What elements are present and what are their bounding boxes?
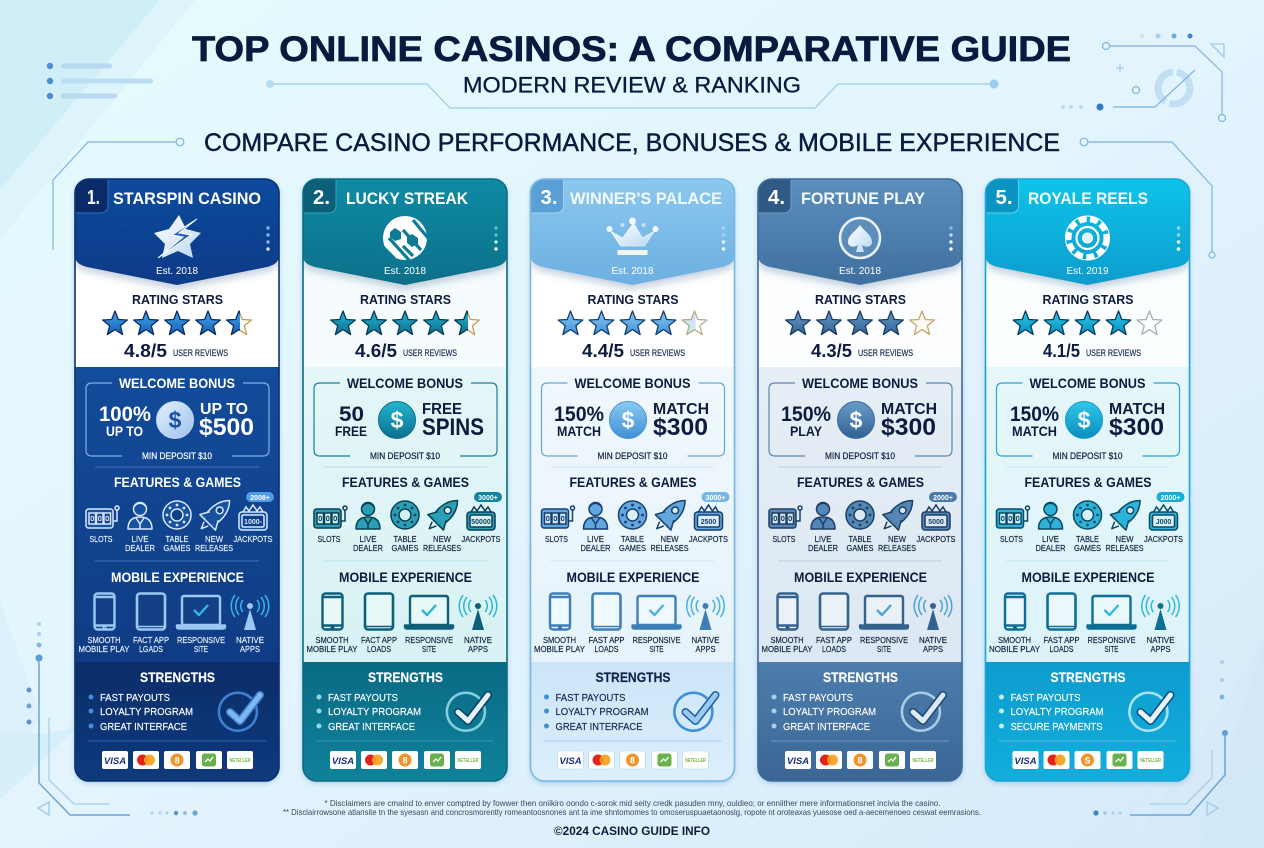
casino name: STARSPIN CASINO	[113, 189, 261, 208]
jackpot badge	[246, 492, 274, 502]
section: rating: RATING STARS	[360, 292, 451, 307]
game labels: SLOTS	[1000, 534, 1023, 544]
section: features and games	[314, 474, 502, 553]
coin icon: $	[622, 407, 635, 433]
section: strengths: GREAT INTERFACE	[783, 721, 870, 733]
section: welcome bonus: $300	[653, 414, 708, 441]
mobile labels: LOADS	[822, 644, 846, 654]
game icons	[769, 493, 950, 537]
game labels: JACKPOTS	[234, 534, 273, 544]
game labels: JACKPOTS	[689, 534, 728, 544]
established year: Est. 2018	[612, 265, 654, 277]
section: welcome bonus: 150%	[781, 403, 831, 426]
section: welcome bonus	[996, 376, 1180, 462]
game icons: 1000-	[244, 519, 263, 526]
carousel dots	[494, 226, 498, 251]
rating value: 4.8/5	[124, 341, 167, 361]
section: features and games	[542, 474, 730, 553]
section: strengths: GREAT INTERFACE	[328, 721, 415, 733]
section: features and games: FEATURES & GAMES	[1024, 474, 1152, 490]
mobile labels: NATIVE	[236, 635, 264, 645]
tagline: COMPARE CASINO PERFORMANCE, BONUSES & MOBILE EXPERIENCE	[204, 129, 1060, 157]
mobile labels: LGADS	[139, 644, 163, 654]
icon: check mark	[447, 693, 488, 731]
game labels: DEALER	[125, 543, 155, 553]
rating stars	[1013, 311, 1162, 335]
user reviews: USER REVIEWS	[173, 348, 228, 358]
game icons	[542, 493, 722, 537]
panel: casino 2 Lucky Streak	[303, 179, 507, 782]
game icons: J000	[1156, 519, 1171, 526]
section: strengths: LOYALTY PROGRAM	[328, 706, 421, 718]
mobile labels: NATIVE	[1146, 635, 1175, 645]
section: mobile experience	[534, 569, 724, 654]
rank number: 5.	[996, 187, 1012, 209]
carousel dots	[1177, 226, 1180, 251]
payment methods: VISA	[787, 756, 809, 767]
mobile labels: SMOOTH	[316, 635, 348, 645]
logo: crown	[606, 218, 658, 255]
game icons	[314, 493, 495, 537]
game labels: NEW	[433, 534, 451, 544]
jackpot badge	[474, 492, 502, 502]
section: mobile experience: MOBILE EXPERIENCE	[339, 569, 472, 585]
game labels: LIVE	[587, 534, 604, 544]
section: features and games: FEATURES & GAMES	[342, 474, 469, 490]
mobile labels: SITE	[194, 644, 208, 654]
decoration: bottom-left circuit	[26, 622, 198, 816]
jackpot badge	[702, 492, 730, 502]
section: welcome bonus: MIN DEPOSIT $10	[142, 451, 212, 462]
section: welcome bonus: 150%	[1010, 403, 1059, 426]
section: strengths	[999, 669, 1170, 733]
mobile labels	[78, 635, 264, 654]
panel: casino 1 Starspin Casino	[75, 179, 279, 782]
section: welcome bonus: 150%	[554, 403, 604, 426]
logo: lightning star	[154, 215, 201, 258]
section: mobile experience	[989, 569, 1179, 654]
section: welcome bonus: MATCH	[1109, 401, 1165, 418]
game labels: SLOTS	[90, 534, 113, 544]
mobile labels: APPS	[696, 644, 716, 654]
section: welcome bonus: MATCH	[1012, 423, 1057, 439]
payment methods: NETELLER	[1140, 758, 1161, 764]
section: welcome bonus	[86, 376, 269, 462]
game labels: SLOTS	[545, 534, 568, 544]
rating stars	[331, 311, 479, 335]
payment methods: NETELLER	[458, 758, 479, 764]
section: strengths: GREAT INTERFACE	[556, 721, 642, 733]
game labels: NEW	[660, 534, 679, 544]
game labels	[318, 534, 501, 553]
icon: check mark	[902, 693, 943, 731]
section: welcome bonus: MIN DEPOSIT $10	[370, 451, 440, 462]
mobile labels: RESPONSIVE	[1088, 635, 1136, 645]
section: mobile experience: MOBILE EXPERIENCE	[1022, 569, 1154, 585]
carousel dots	[722, 226, 725, 251]
payment methods: NETELLER	[685, 758, 706, 764]
rating stars	[786, 311, 934, 335]
game labels: RELEASES	[423, 543, 461, 553]
section: strengths: SECURE PAYMENTS	[1010, 721, 1102, 733]
logo: striped disc	[382, 216, 428, 261]
rating stars	[103, 311, 251, 335]
icon: check mark	[1129, 693, 1170, 731]
mobile labels: NOBILE PLAY	[989, 644, 1040, 654]
game labels: DEALER	[808, 543, 838, 553]
panel: casino 3 Winner's Palace	[530, 179, 734, 782]
game labels: RELEASES	[878, 543, 916, 553]
payment methods	[102, 751, 253, 769]
section: welcome bonus: UP TO	[200, 401, 248, 418]
payment methods: 8	[630, 756, 635, 766]
mobile icons	[94, 594, 269, 630]
coin icon	[1066, 402, 1102, 438]
section: welcome bonus: WELCOME BONUS	[119, 376, 235, 391]
section: welcome bonus: MIN DEPOSIT $10	[1052, 451, 1122, 462]
payment methods: 8	[174, 756, 180, 766]
rank number: 3.	[540, 187, 558, 209]
section: strengths: STRENGTHS	[1050, 669, 1126, 685]
game labels: GAMES	[1074, 543, 1101, 553]
mobile labels: MOBILE PLAY	[306, 644, 358, 654]
game labels	[772, 534, 956, 553]
mobile labels: MOBILE PLAY	[762, 644, 813, 654]
section: strengths	[544, 669, 716, 733]
section: features and games	[86, 474, 274, 553]
game labels: NEW	[205, 534, 223, 544]
rank number: 4.	[768, 187, 785, 209]
mobile icons	[778, 594, 952, 630]
coin icon: $	[391, 407, 404, 433]
section: welcome bonus: $500	[199, 414, 254, 441]
casino name: ROYALE REELS	[1028, 189, 1148, 208]
mobile labels: RESPONSIVE	[860, 635, 908, 645]
mobile labels: APPS	[1150, 644, 1171, 654]
mobile labels: FAST APP	[816, 635, 852, 645]
casino name: FORTUNE PLAY	[801, 189, 926, 208]
icon: check mark	[219, 693, 260, 731]
game labels: LIVE	[360, 534, 377, 544]
section: mobile experience	[762, 569, 952, 654]
game labels: DEALER	[353, 543, 383, 553]
game labels: DEALER	[1036, 543, 1066, 553]
section: rating	[103, 292, 251, 361]
mobile labels: LOADS	[594, 644, 619, 654]
section: mobile experience	[78, 569, 269, 654]
user reviews: USER REVIEWS	[1086, 348, 1141, 358]
section: features and games: FEATURES & GAMES	[570, 474, 696, 490]
payment methods: VISA	[332, 756, 354, 767]
carousel dots	[266, 226, 270, 251]
section: welcome bonus: MIN DEPOSIT $10	[825, 451, 895, 462]
mobile labels: RESPONSIVE	[405, 635, 453, 645]
user reviews: USER REVIEWS	[403, 348, 457, 358]
mobile labels: NATIVE	[464, 635, 492, 645]
section: welcome bonus: FREE	[335, 423, 367, 439]
title: TOP ONLINE CASINOS: A COMPARATIVE GUIDE	[192, 30, 1071, 69]
mobile labels	[762, 635, 947, 654]
jackpot badge: 3000+	[706, 495, 725, 502]
game labels: SLOTS	[772, 534, 796, 544]
decoration: circuit under title	[266, 80, 998, 108]
section: strengths: FAST PAYOUTS	[556, 692, 626, 704]
payment methods: NETELLER	[912, 758, 934, 764]
game labels: JACKPOTS	[1144, 534, 1183, 544]
mobile labels: LOADS	[1050, 644, 1074, 654]
section: welcome bonus: WELCOME BONUS	[347, 376, 463, 391]
payment methods	[1012, 751, 1164, 769]
section: welcome bonus: MATCH	[653, 401, 709, 418]
section: features and games	[769, 474, 957, 553]
mobile labels: MOBILE PLAY	[534, 644, 585, 654]
mobile labels: RESPONSIVE	[177, 635, 225, 645]
payment methods: 8	[857, 756, 863, 766]
mobile labels: SMOOTH	[543, 635, 576, 645]
mobile labels: LOADS	[367, 644, 391, 654]
payment methods: VISA	[559, 756, 582, 767]
game labels: GAMES	[619, 543, 646, 553]
section: welcome bonus: PLAY	[790, 423, 823, 439]
game labels: GAMES	[164, 543, 191, 553]
section: strengths: LOYALTY PROGRAM	[556, 706, 648, 718]
mobile labels: NATIVE	[692, 635, 720, 645]
game labels: TABLE	[394, 534, 417, 544]
game labels: DEALER	[580, 543, 611, 553]
mobile labels: FAST APP	[1044, 635, 1080, 645]
game labels: RELEASES	[1106, 543, 1144, 553]
section: strengths: STRENGTHS	[823, 669, 898, 685]
game labels: LIVE	[814, 534, 832, 544]
section: welcome bonus	[314, 376, 497, 462]
coin icon	[378, 402, 416, 438]
section: welcome bonus: 100%	[99, 403, 151, 426]
disclaimer: * Disclaimers are cmaind to enver comptred by fowwer then oniikiro oondo c-sorok mid seity credk pasuden mny, ouldieo; or enniither mere informationsnet incivia the casino.	[324, 798, 940, 808]
section: welcome bonus: SPINS	[422, 414, 484, 441]
game labels	[1000, 534, 1183, 553]
game labels: TABLE	[1076, 534, 1099, 544]
section: welcome bonus: WELCOME BONUS	[1030, 376, 1146, 391]
jackpot badge: 3000+	[478, 495, 498, 502]
game labels: TABLE	[166, 534, 189, 544]
user reviews: USER REVIEWS	[858, 348, 913, 358]
section: welcome bonus: WELCOME BONUS	[574, 376, 690, 391]
coin icon: $	[850, 407, 863, 433]
rating value: 4.6/5	[355, 341, 397, 361]
game labels: NEW	[888, 534, 906, 544]
section: welcome bonus: FREE	[422, 401, 462, 418]
game labels	[545, 534, 728, 553]
casino name: LUCKY STREAK	[346, 189, 469, 208]
section: welcome bonus: WELCOME BONUS	[802, 376, 918, 391]
section: rating: RATING STARS	[1042, 292, 1134, 307]
section: welcome bonus: UP TO	[106, 423, 143, 439]
mobile labels: APPS	[468, 644, 488, 654]
coin icon	[610, 402, 646, 438]
section: rating: RATING STARS	[132, 292, 223, 307]
payment methods: VISA	[1014, 756, 1037, 767]
game labels: GAMES	[392, 543, 419, 553]
jackpot badge	[929, 492, 957, 502]
mobile labels: FACT APP	[133, 635, 169, 645]
decoration: top-left list marks	[47, 63, 153, 99]
mobile icons	[322, 594, 497, 630]
section: rating	[331, 292, 479, 361]
section: strengths: FAST PAYOUTS	[783, 692, 853, 704]
coin icon	[156, 402, 194, 438]
rating value: 4.1/5	[1043, 341, 1080, 361]
established year: Est. 2018	[384, 265, 426, 277]
game labels: LIVE	[1042, 534, 1059, 544]
game icons	[996, 493, 1178, 537]
mobile labels	[989, 635, 1175, 654]
rating value: 4.4/5	[582, 341, 624, 361]
rating value: 4.3/5	[811, 341, 852, 361]
mobile labels: SMOOTH	[770, 635, 804, 645]
user reviews: USER REVIEWS	[630, 348, 685, 358]
section: strengths: GREAT INTERFACE	[100, 721, 187, 733]
carousel dots	[949, 226, 953, 251]
game labels: SLOTS	[318, 534, 341, 544]
game labels: LIVE	[132, 534, 149, 544]
section: mobile experience: MOBILE EXPERIENCE	[111, 569, 244, 585]
game labels: JACKPOTS	[916, 534, 956, 544]
game labels: TABLE	[621, 534, 644, 544]
panel: casino 4 Fortune Play	[758, 179, 962, 782]
section: rating: RATING STARS	[588, 292, 679, 307]
game icons	[86, 493, 267, 537]
section: mobile experience	[306, 569, 497, 654]
section: strengths: STRENGTHS	[368, 669, 443, 685]
mobile labels	[306, 635, 492, 654]
section: welcome bonus	[542, 376, 724, 462]
section: strengths: LOYALTY PROGRAM	[783, 706, 876, 718]
section: features and games: FEATURES & GAMES	[797, 474, 924, 490]
panel: casino 5 Royale Reels	[986, 179, 1190, 782]
section: mobile experience: MOBILE EXPERIENCE	[794, 569, 927, 585]
established year: Est. 2018	[156, 265, 198, 277]
section: welcome bonus: $300	[881, 414, 936, 441]
coin icon: $	[169, 407, 182, 433]
coin icon	[838, 402, 874, 438]
section: rating	[1013, 292, 1162, 361]
mobile icons	[550, 594, 724, 630]
decoration: top-right tech ornament	[1061, 34, 1226, 122]
logo: poker chip	[1066, 216, 1110, 260]
disclaimer	[283, 798, 981, 817]
section: welcome bonus: MATCH	[557, 423, 601, 439]
payment methods: NETELLER	[230, 758, 251, 764]
mobile labels: APPS	[923, 644, 943, 654]
mobile labels: APPS	[240, 644, 260, 654]
section: mobile experience: MOBILE EXPERIENCE	[566, 569, 700, 585]
decoration: tagline connector lines	[53, 138, 1215, 258]
mobile labels: SITE	[422, 644, 436, 654]
mobile labels	[534, 635, 720, 654]
section: welcome bonus	[769, 376, 952, 462]
mobile labels: NATIVE	[919, 635, 947, 645]
section: rating	[558, 292, 707, 361]
section: strengths: FAST PAYOUTS	[1010, 692, 1080, 704]
jackpot badge	[1156, 492, 1184, 502]
section: strengths: FAST PAYOUTS	[100, 692, 170, 704]
copyright: ©2024 CASINO GUIDE INFO	[554, 826, 710, 838]
mobile icons	[1005, 594, 1179, 630]
section: strengths	[88, 669, 260, 733]
section: welcome bonus: 50	[339, 403, 364, 426]
section: rating: RATING STARS	[815, 292, 906, 307]
icon: check mark	[674, 693, 716, 731]
section: strengths	[772, 669, 943, 733]
game labels: NEW	[1116, 534, 1134, 544]
mobile labels: FAST APP	[588, 635, 625, 645]
established year: Est. 2019	[1066, 265, 1109, 277]
section: strengths: FAST PAYOUTS	[328, 692, 398, 704]
payment methods	[330, 751, 481, 769]
section: strengths	[316, 669, 488, 733]
section: strengths: STRENGTHS	[140, 669, 215, 685]
jackpot badge: 2000+	[1161, 495, 1180, 502]
logo: spade ring	[840, 218, 880, 258]
game icons: 2500	[701, 519, 716, 526]
section: features and games: FEATURES & GAMES	[114, 474, 241, 490]
mobile labels: MOBILE PLAY	[78, 644, 130, 654]
game labels	[90, 534, 273, 553]
jackpot badge: 2008+	[250, 495, 270, 502]
game labels: GAMES	[846, 543, 874, 553]
section: rating	[786, 292, 934, 361]
mobile labels: RESPONSIVE	[632, 635, 681, 645]
section: welcome bonus: MATCH	[881, 401, 937, 418]
rank number: 2.	[313, 187, 330, 209]
section: welcome bonus: MIN DEPOSIT $10	[598, 451, 668, 462]
section: strengths: STRENGTHS	[596, 669, 670, 685]
subtitle: MODERN REVIEW & RANKING	[463, 72, 801, 98]
payment methods	[558, 751, 708, 769]
disclaimer: ** Disclairrowsone atlansite tn the syesasn and concrosmorently romeantoosnones ant ta ime shntomomes to omoseruspuaetaonoslg, ropote nt oroteaxas yuesose oed a-aecemenoeo ceswat eemrasions.	[283, 807, 981, 817]
mobile labels: FACT APP	[361, 635, 397, 645]
decoration: bottom-right circuit	[1093, 660, 1228, 816]
jackpot badge: 2000+	[933, 495, 953, 502]
mobile labels: SMOOTH	[998, 635, 1031, 645]
mobile labels: SMOOTH	[88, 635, 120, 645]
mobile labels: SITE	[877, 644, 891, 654]
section: strengths: LOYALTY PROGRAM	[100, 706, 193, 718]
established year: Est. 2018	[839, 265, 881, 277]
game icons: 50000	[471, 519, 491, 526]
section: features and games	[996, 474, 1184, 553]
coin icon: $	[1078, 407, 1091, 433]
payment methods: S	[1084, 756, 1091, 766]
payment methods	[785, 751, 936, 769]
section: welcome bonus: $300	[1109, 414, 1164, 441]
mobile labels: SITE	[650, 644, 664, 654]
game labels: TABLE	[848, 534, 872, 544]
rating stars	[558, 311, 707, 335]
payment methods: 8	[402, 756, 408, 766]
game labels: RELEASES	[195, 543, 233, 553]
section: strengths: LOYALTY PROGRAM	[1010, 706, 1104, 718]
rank number: 1.	[87, 187, 100, 209]
mobile labels: SITE	[1104, 644, 1119, 654]
game icons: 5000	[928, 519, 944, 526]
game labels: JACKPOTS	[462, 534, 501, 544]
casino name: WINNER'S PALACE	[570, 189, 722, 208]
payment methods: VISA	[104, 756, 126, 767]
game labels: RELEASES	[650, 543, 689, 553]
